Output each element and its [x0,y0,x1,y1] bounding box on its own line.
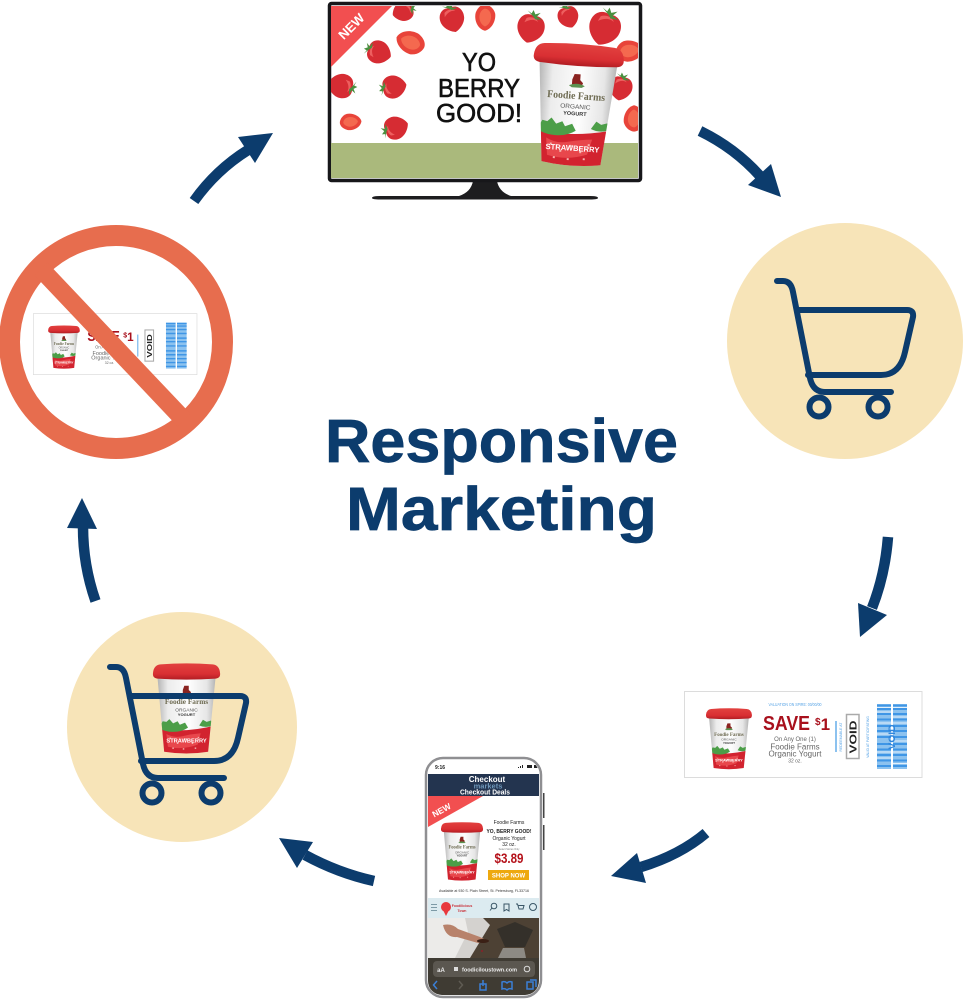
small coupon details: On Any One (1) [95,345,124,350]
small coupon cup: STRAWBERRY [54,361,74,364]
phone body [426,758,541,997]
arrow: purchase to suppressed coupon [67,498,97,601]
arrow: TV to cart [700,131,781,197]
void stamp: VOID [848,720,860,754]
coupon yogurt cup: STRAWBERRY [715,758,743,763]
slogan: YO [462,49,496,77]
coupon yogurt cup: YOGURT [723,741,735,745]
coupon yogurt cup [706,708,752,770]
panel: suppressed coupon [10,236,222,448]
small coupon rule [137,335,138,357]
panel: coupon [684,692,922,778]
beige circle [727,223,963,459]
small coupon details: Organic Yogurt [91,356,128,362]
yogurt cup: YOGURT [563,111,587,118]
app header: Checkout [469,775,506,784]
arrow: suppressed coupon to TV [194,133,273,201]
coupon card [684,692,922,778]
cart yogurt cup: ORGANIC [175,707,198,713]
product cup [441,822,483,882]
retailer navigation bar: Foodilicious [452,904,472,908]
panel: smartphone [426,758,544,997]
product description: Foodie Farms [494,820,525,826]
void stamp [846,714,860,758]
coupon product details: Organic Yogurt [769,750,822,758]
barcode: VOID [887,724,897,750]
small coupon cup: Foodie Farms [54,342,75,346]
coupon yogurt cup: ORGANIC [721,738,737,742]
new ribbon [331,6,392,67]
ribbon label: NEW [335,10,368,42]
price: $3.89 [494,850,524,866]
coupon blue rule: REDEEMABLE AT [839,722,843,751]
TV frame [330,4,640,180]
panel: empty shopping cart [727,223,963,459]
product description: 32 oz. [502,842,516,848]
barcode [877,704,907,769]
strawberries [331,6,638,140]
product cup: ORGANIC [455,850,470,854]
status bar [435,765,538,769]
coupon product details [769,737,822,764]
retailer navigation bar [428,898,539,918]
small coupon amount: $ [123,332,127,339]
TV stand [372,181,598,200]
TV screen artwork [326,0,645,178]
small coupon amount: 1 [127,330,134,344]
small barcode [166,323,187,369]
icon: prohibition sign [10,236,222,448]
coupon amount: $ [815,717,821,728]
yogurt cup: ORGANIC [560,103,591,112]
product description: Select Stores Only [499,848,520,851]
small coupon cup [48,326,80,370]
slogan: BERRY [438,75,520,103]
product cup: Foodie Farms [448,845,476,851]
yogurt cup [526,41,625,171]
small coupon [33,314,197,375]
retailer navigation bar: Town [458,909,466,913]
arrow: phone to purchase [279,838,374,881]
arrow: cart to coupon [858,537,888,637]
small coupon details [91,345,128,365]
phone side buttons [543,793,544,850]
product cup: YOGURT [457,855,468,857]
coupon product details: 32 oz. [788,758,802,764]
new ribbon [428,796,483,827]
small void stamp [145,330,154,361]
title: Marketing [346,475,657,543]
small coupon cup: ORGANIC [59,347,70,349]
panel: TV advertisement [326,0,645,200]
panel: cart with yogurt [67,612,297,842]
browser bar: aA [437,968,446,974]
coupon product details: On Any One (1) [774,737,816,743]
cart yogurt cup: YOGURT [178,712,196,717]
beige circle [67,612,297,842]
title [325,407,678,543]
ribbon label: NEW [430,800,453,819]
icon: empty cart [777,281,913,416]
coupon yogurt cup: Foodie Farms [714,732,744,738]
product description [486,820,532,851]
app header: markets [474,782,502,790]
green band [331,143,638,178]
coupon offer: SAVE [763,712,810,735]
small coupon details: 32 oz. [105,361,114,365]
shop now button [488,870,529,880]
chef photo [428,918,539,959]
icon: cart [110,667,246,802]
coupon fine print: VALID AT PARTICIPATING [866,716,870,758]
yogurt cup: STRAWBERRY [545,142,600,155]
small coupon details: Foodie Farms [93,351,127,357]
small void stamp: VOID [145,334,154,358]
product description: Organic Yogurt [492,836,526,842]
coupon validity text: VALUATION ON SPIRE: 00/00/00 [768,702,822,707]
yogurt cup: Foodie Farms [547,88,605,104]
cart yogurt cup: STRAWBERRY [166,739,207,744]
browser toolbar icons [434,980,536,990]
cart yogurt cup: Foodie Farms [165,697,208,706]
slogan [436,49,522,128]
browser bar: foodiciloustown.com [462,968,517,974]
product description: YO, BERRY GOOD! [486,829,532,835]
product cup: STRAWBERRY [449,871,475,875]
cart yogurt cup [153,663,220,755]
coupon product details: Foodie Farms [770,742,820,752]
browser bar [428,958,539,995]
store address: Available at 930 S. Plain Street, St. Petersburg, FL33716 [439,889,529,893]
small coupon cup: YOGURT [60,350,69,352]
status bar: 9:16 [435,765,445,771]
title: Responsive [325,407,678,475]
app header [428,774,539,796]
slogan: GOOD! [436,100,522,128]
app header: Checkout Deals [460,788,510,796]
shop now button: SHOP NOW [492,874,525,880]
small coupon offer: SAVE [87,329,120,345]
coupon blue rule [835,721,843,752]
coupon amount: 1 [821,715,830,734]
arrow: coupon to phone [611,833,706,883]
phone screen [428,760,539,995]
